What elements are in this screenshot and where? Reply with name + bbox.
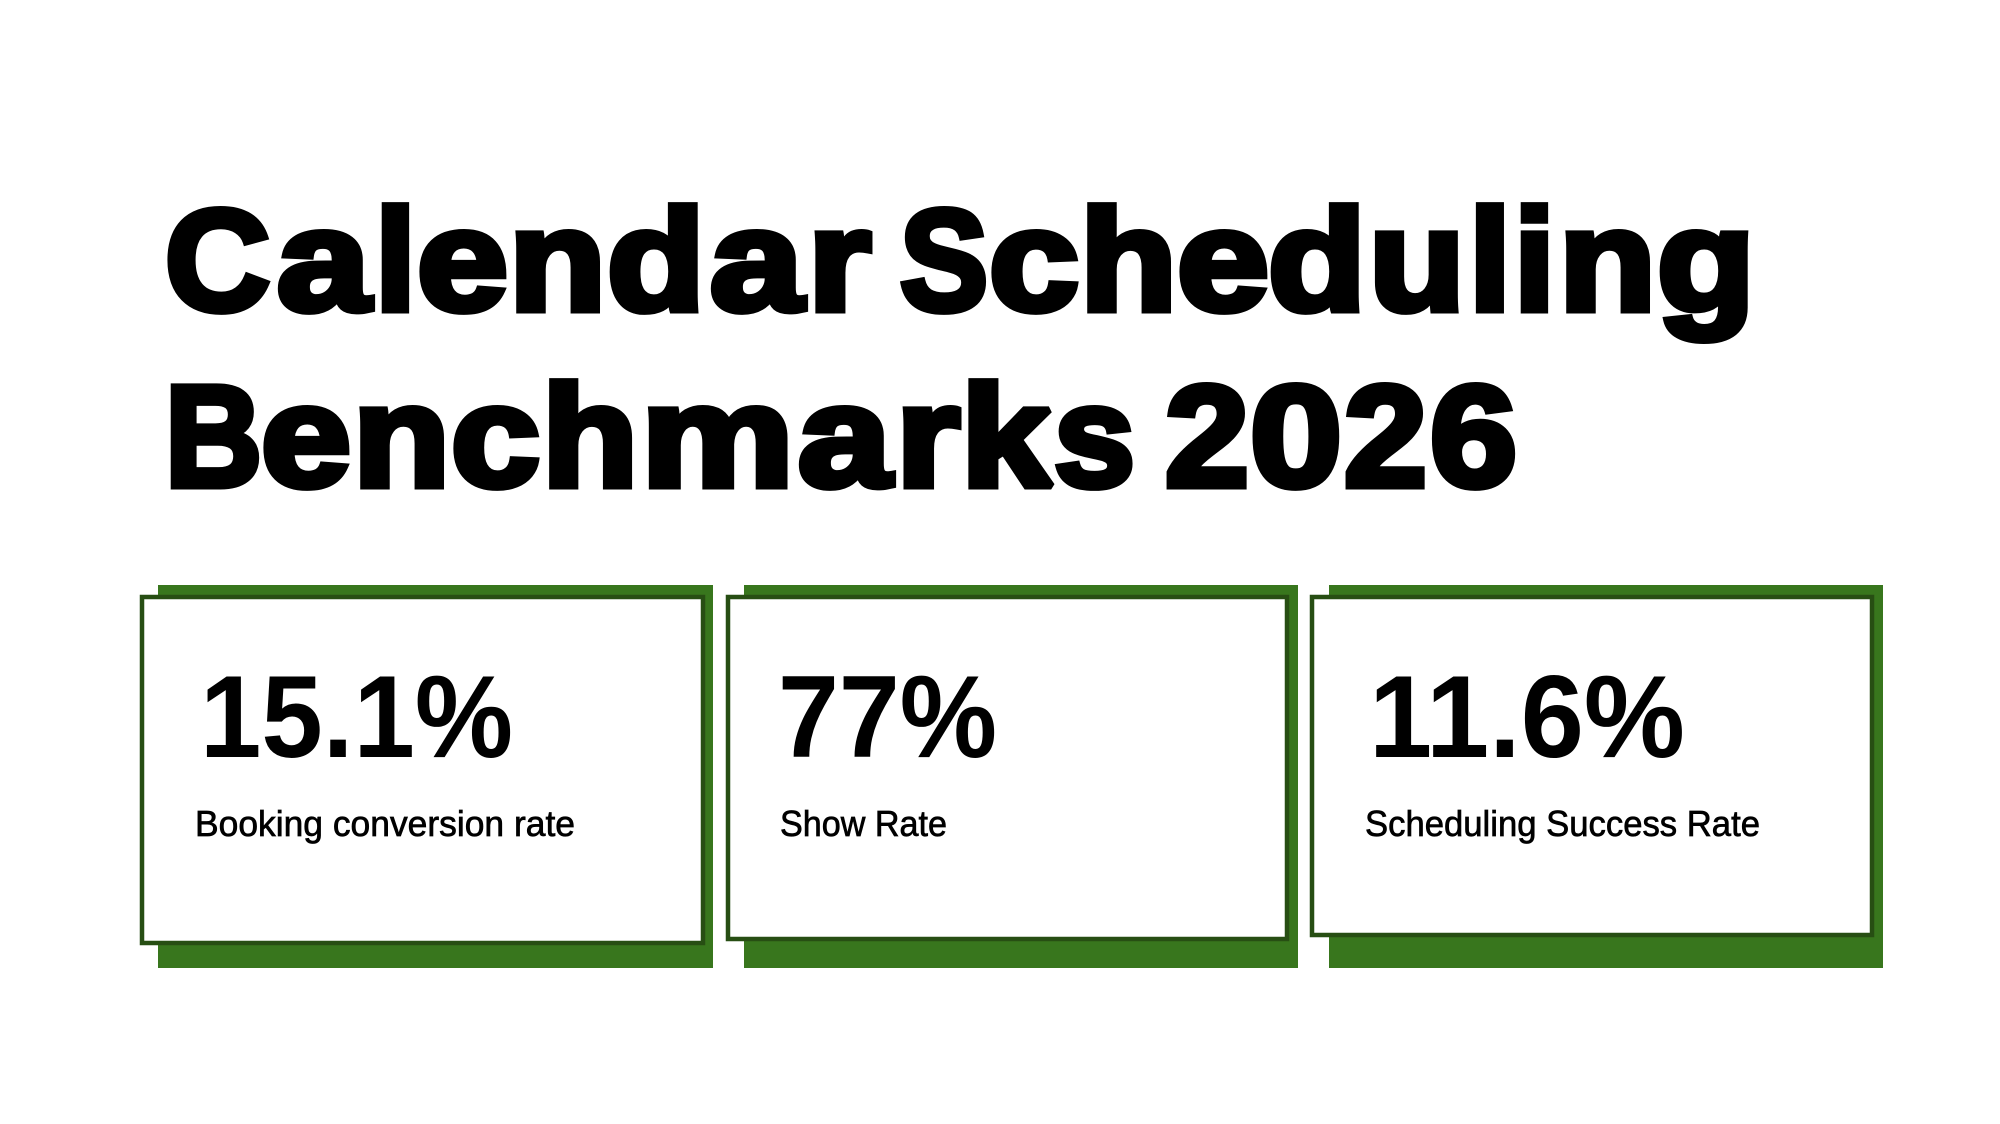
card shadow — [744, 585, 1298, 968]
panel: booking conversion rate — [142, 585, 713, 968]
title: 2 — [1344, 356, 1427, 517]
title: c — [451, 356, 540, 517]
title: n — [509, 180, 606, 341]
panel: show rate — [728, 585, 1298, 968]
title: k — [961, 356, 1052, 517]
card frame — [1312, 597, 1872, 935]
panel: scheduling success rate — [1312, 585, 1883, 968]
title: a — [798, 356, 892, 517]
title: a — [710, 180, 804, 341]
title: s — [1054, 356, 1135, 517]
title: d — [607, 180, 705, 341]
title: l — [375, 180, 416, 341]
title: h — [1080, 180, 1177, 341]
title: e — [417, 180, 508, 341]
title: B — [165, 356, 262, 517]
title: r — [808, 180, 871, 341]
title: g — [1657, 180, 1755, 341]
stat label: Booking conversion rate — [195, 803, 575, 844]
title: a — [277, 180, 371, 341]
title: m — [641, 356, 794, 517]
title: c — [989, 180, 1079, 341]
title: n — [1559, 180, 1656, 341]
title: 2 — [1165, 356, 1249, 517]
title — [165, 180, 1755, 517]
stat value: 77% — [778, 651, 997, 782]
stat label: Scheduling Success Rate — [1365, 803, 1760, 844]
stat value: 15.1% — [200, 651, 513, 782]
stat value: 11.6% — [1369, 651, 1685, 782]
title: u — [1369, 180, 1465, 341]
card shadow — [158, 585, 713, 968]
title: e — [261, 356, 351, 517]
card frame — [142, 597, 703, 943]
title: S — [900, 180, 988, 341]
title: h — [542, 356, 638, 517]
title: 6 — [1430, 356, 1517, 517]
card frame — [728, 597, 1287, 939]
title: n — [353, 356, 450, 517]
title: i — [1514, 180, 1555, 341]
stat label: Show Rate — [780, 803, 947, 844]
title: C — [165, 180, 270, 341]
title: 0 — [1250, 356, 1342, 517]
title: r — [896, 356, 960, 517]
card shadow — [1329, 585, 1883, 968]
title: e — [1177, 180, 1269, 341]
title: d — [1268, 180, 1366, 341]
title: l — [1469, 180, 1511, 341]
